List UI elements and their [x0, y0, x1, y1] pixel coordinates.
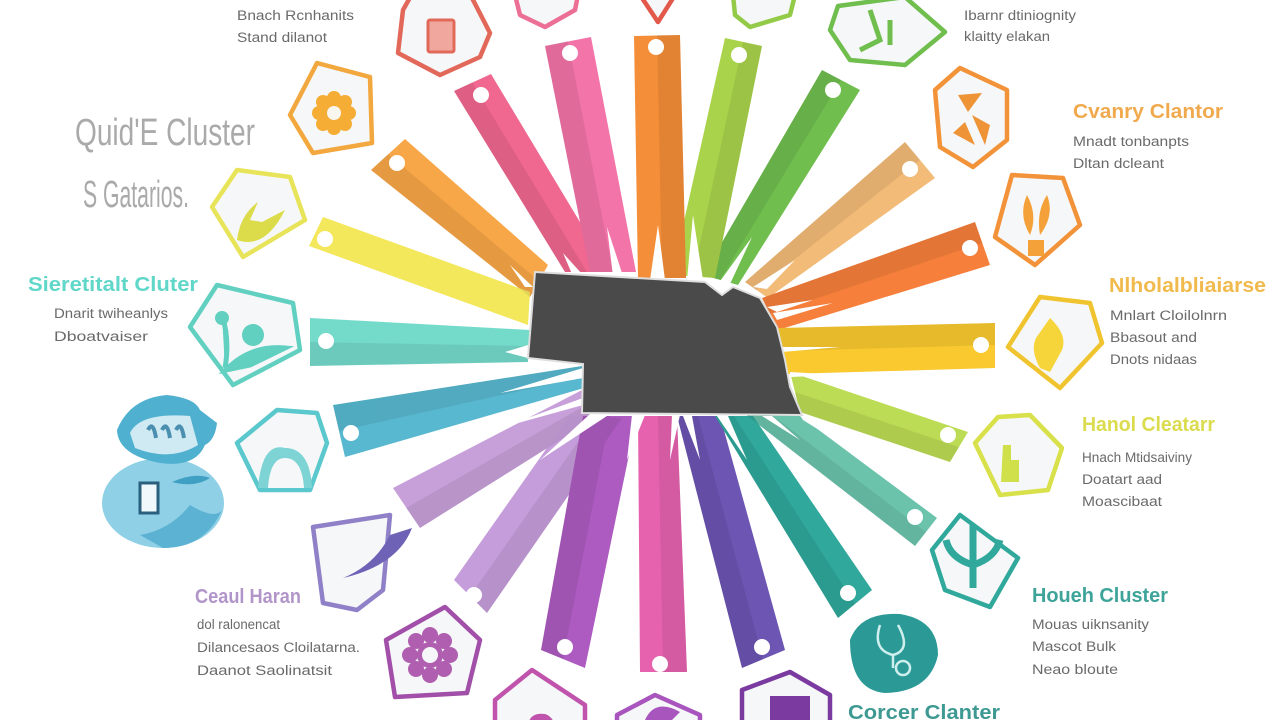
label: top left	[237, 8, 354, 45]
white starburst slits	[500, 215, 840, 460]
label: top left: Bnach Rcnhanits	[237, 8, 354, 23]
label: health cluster: Mascot Bulk	[1032, 639, 1116, 654]
hexagon icons	[190, 0, 1102, 720]
label: top right	[964, 8, 1076, 44]
label: country cluster: Cvanry Clantor	[1073, 101, 1223, 123]
radial bars	[309, 35, 995, 672]
label: country cluster: Dltan dcleant	[1073, 156, 1164, 171]
blue blobs icon	[102, 395, 224, 548]
label: craft cluster: Dilancesaos Cloilatarna.	[197, 640, 360, 655]
label: health cluster	[1032, 585, 1168, 677]
label: health cluster: Neao bloute	[1032, 662, 1118, 677]
label: health cluster: Mouas uiknsanity	[1032, 617, 1149, 632]
label: right cluster: Bbasout and	[1110, 330, 1197, 345]
teal stethoscope icon	[850, 614, 938, 693]
bar shading	[310, 35, 995, 672]
label: top right: klaitty elakan	[964, 29, 1050, 44]
label: craft cluster: Ceaul Haran	[195, 586, 301, 608]
label: serenity cluster: Dnarit twiheanlys	[54, 306, 168, 321]
label: hand cluster: Moascibaat	[1082, 494, 1162, 509]
label: right cluster: Dnots nidaas	[1110, 352, 1197, 367]
bar end dots	[317, 39, 989, 672]
label: country cluster: Mnadt tonbanpts	[1073, 134, 1189, 149]
label: hand cluster: Doatart aad	[1082, 472, 1162, 487]
label: craft cluster	[195, 586, 360, 678]
label: serenity cluster: Dboatvaiser	[54, 329, 149, 344]
icon glyphs	[215, 10, 1064, 720]
label: top right: Ibarnr dtiniognity	[964, 8, 1076, 23]
label: country cluster	[1073, 101, 1223, 171]
label: top left: Stand dilanot	[237, 30, 327, 45]
label: craft cluster: Daanot Saolinatsit	[197, 663, 332, 678]
label: health cluster: Houeh Cluster	[1032, 585, 1168, 607]
title: S Gatarios.	[83, 174, 189, 216]
label: serenity cluster	[28, 274, 198, 344]
label: hand cluster	[1082, 414, 1215, 509]
label: right cluster: Nlholalbliaiarse	[1109, 275, 1266, 297]
label: right cluster: Mnlart Cloilolnrn	[1110, 308, 1227, 323]
label: hand cluster: Hnach Mtidsaiviny	[1082, 450, 1192, 465]
title: Quid'E Cluster	[75, 112, 255, 154]
title	[75, 112, 255, 216]
label: hand cluster: Hanol Cleatarr	[1082, 414, 1215, 436]
label: right cluster	[1109, 275, 1266, 367]
brush stroke over the purple hexagon	[343, 528, 412, 578]
central dark shape	[528, 272, 802, 415]
label: craft cluster: dol ralonencat	[197, 617, 280, 632]
label: serenity cluster: Sieretitalt Cluter	[28, 274, 198, 296]
